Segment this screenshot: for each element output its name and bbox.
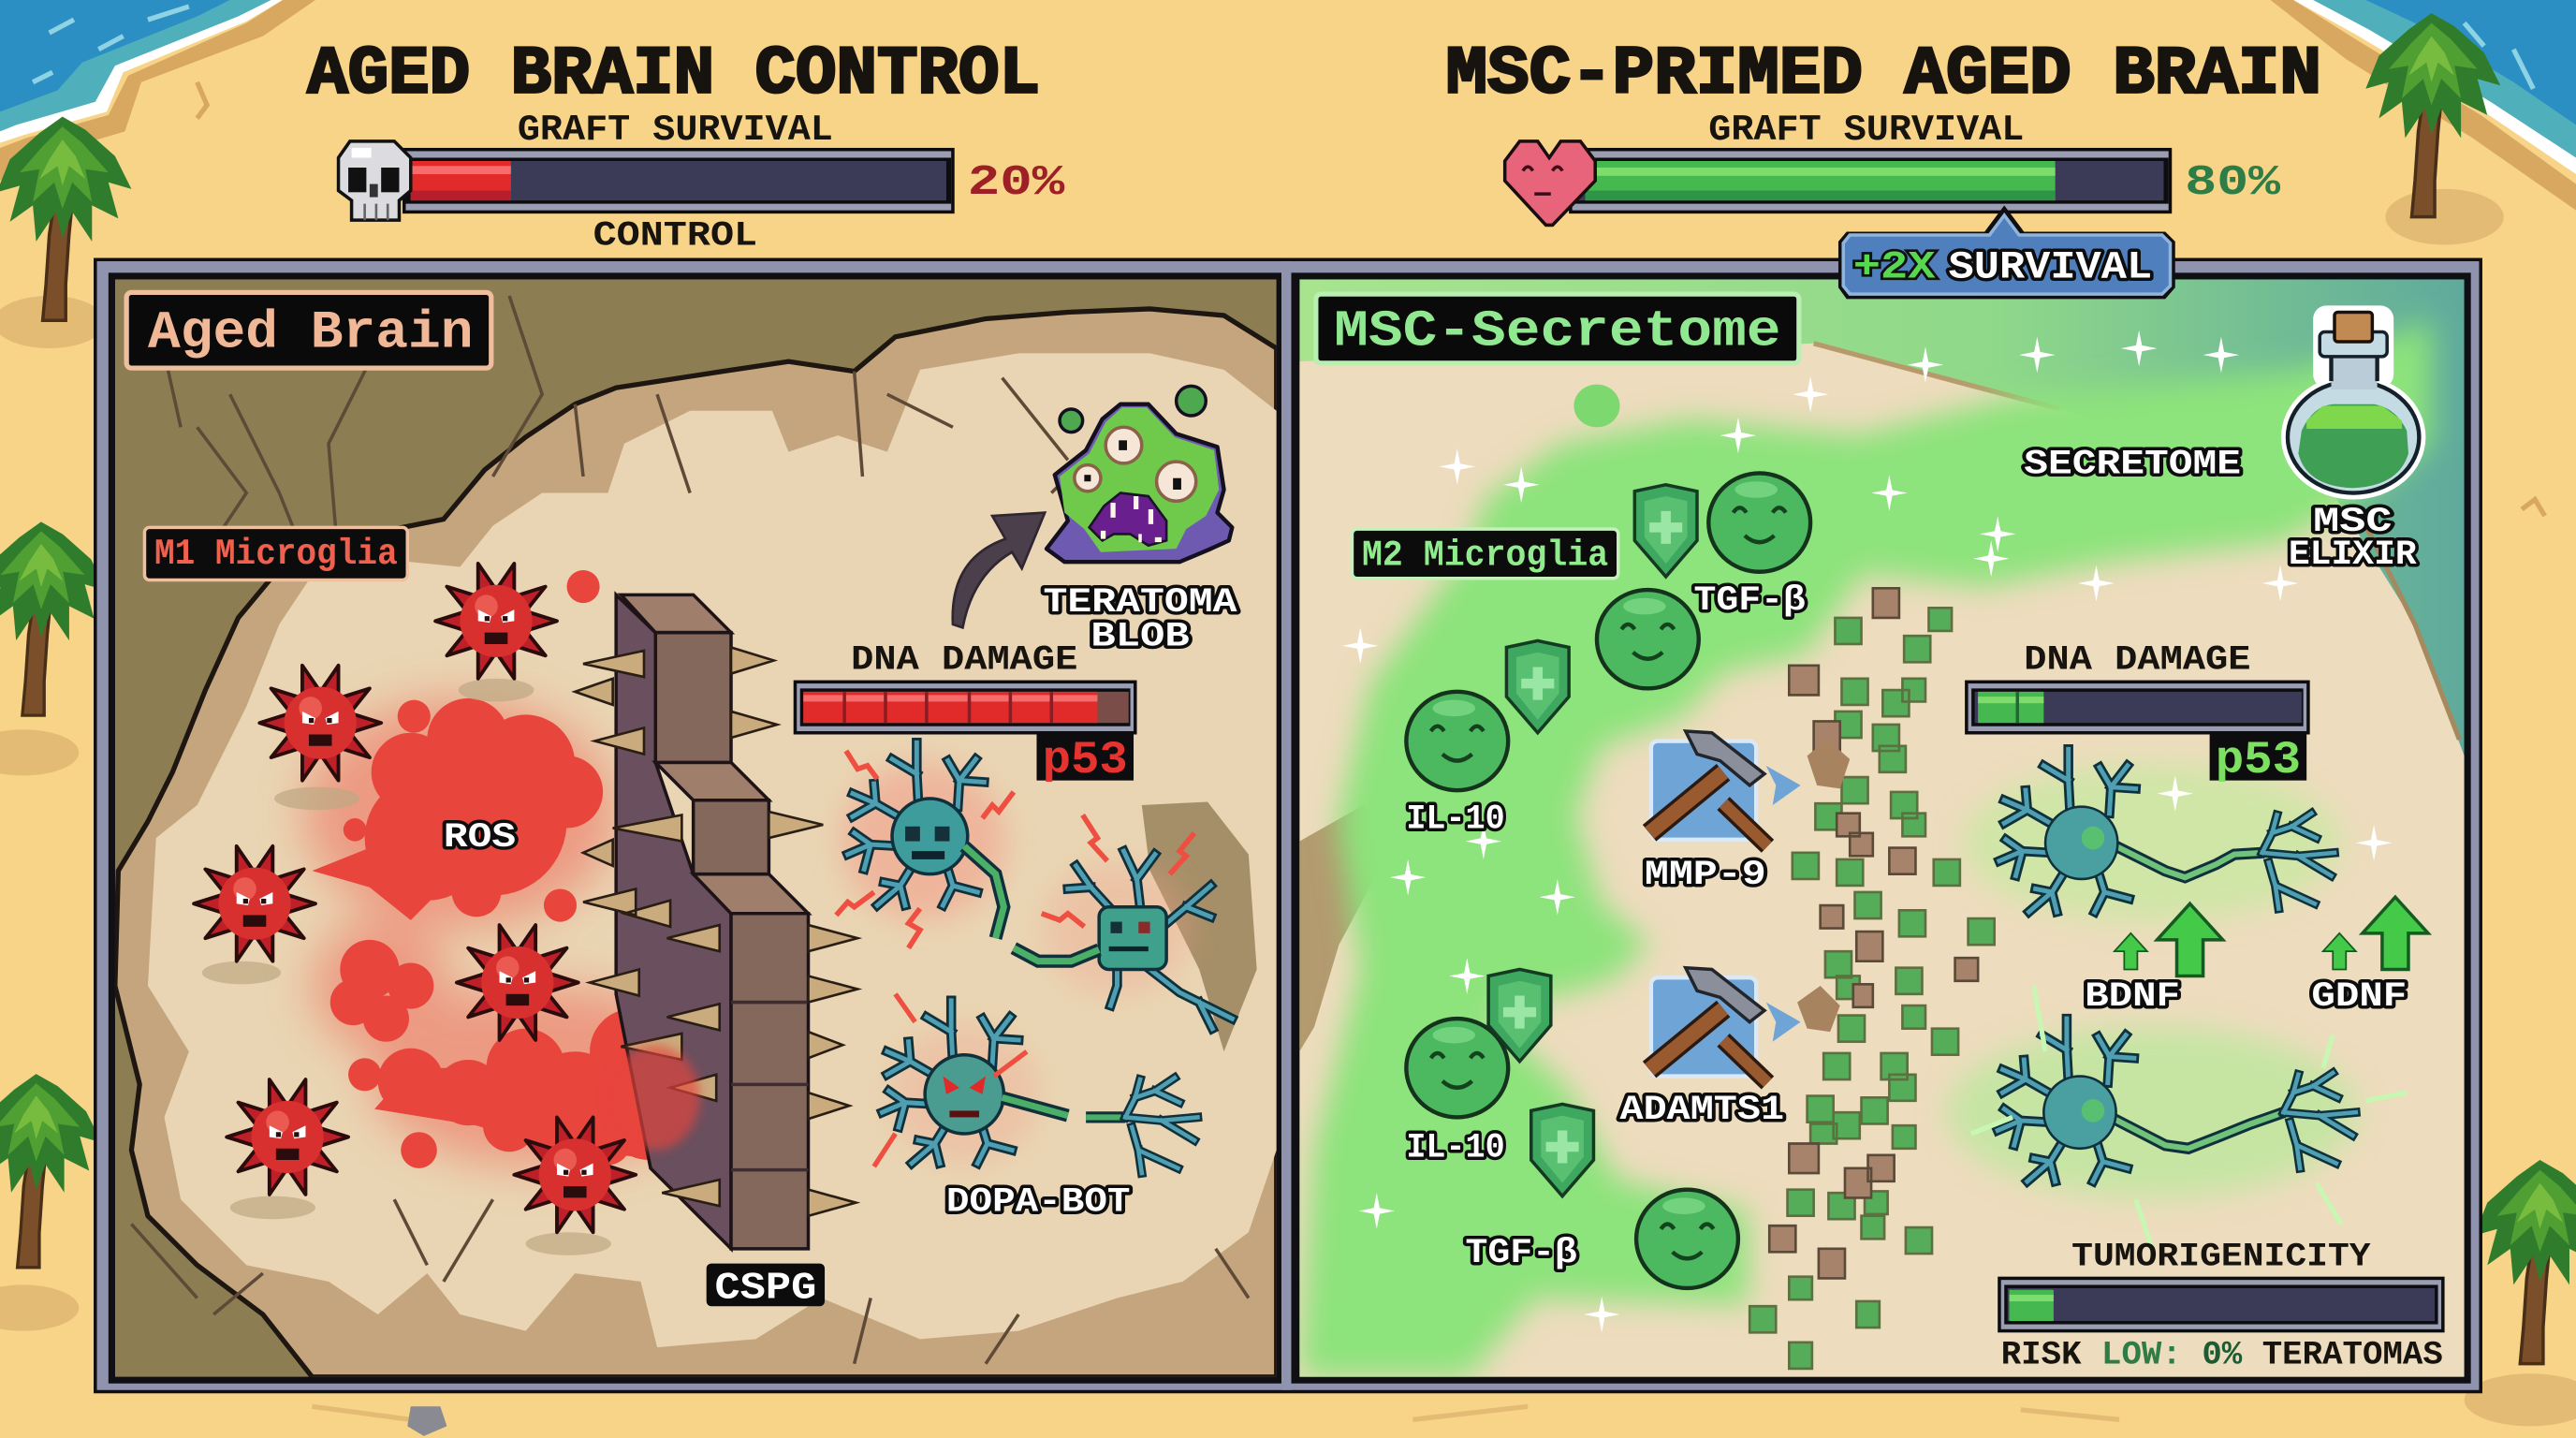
label: teratoma blob: TERATOMA: [1043, 583, 1238, 623]
label: msc elixir: ELIXIR: [2289, 536, 2418, 575]
ros cloud: lower: [374, 1011, 648, 1165]
dark lesion patch: [1142, 801, 1257, 1051]
label: msc secretome: [1316, 294, 1799, 363]
ros overlap on wall: [607, 1045, 700, 1151]
msc survival gauge: GRAFT SURVIVAL: [1708, 110, 2024, 151]
title: aged brain control: AGED BRAIN CONTROL: [307, 36, 1040, 112]
fill: 20 percent: [411, 161, 511, 200]
brain outline: [115, 309, 1277, 1377]
label: m2 microglia: M2 Microglia: [1362, 536, 1608, 577]
rubble near enzymes: [1797, 740, 1850, 1032]
label: secretome: SECRETOME: [2024, 445, 2241, 484]
label: teratoma blob: [1043, 583, 1238, 657]
m2 microglia smiling group: [1406, 473, 1810, 1288]
fill: 80 percent: [1586, 161, 2056, 200]
icon: msc elixir bottle: [2281, 305, 2425, 500]
panel background: atrophied tissue: [115, 279, 1277, 1377]
label: aged brain: Aged Brain: [148, 302, 473, 362]
healed neuron: lower: [1971, 986, 2407, 1249]
neurotrophic arrows: bdnf: [2115, 903, 2223, 976]
dna damage gauge: high: [794, 640, 1137, 786]
csps debris squares: green: [1749, 608, 1995, 1369]
icon: heart: [1505, 141, 1595, 225]
label: bdnf: BDNF: [2085, 977, 2180, 1017]
spiked cspg wall: [575, 594, 857, 1249]
label: teratoma blob: BLOB: [1090, 618, 1190, 657]
m1 microglia: group of six: [194, 564, 636, 1232]
brown scar on left edge: [1299, 805, 1397, 1051]
ros cloud: upper: [312, 698, 603, 920]
label: aged brain: [126, 292, 491, 368]
label: gdnf: GDNF: [2311, 977, 2407, 1017]
label: adamts1: ADAMTS1: [1620, 1091, 1784, 1130]
tag: p53: p53: [1043, 734, 1128, 786]
label: dopa-bot: DOPA-BOT: [946, 1182, 1131, 1222]
sparkles: [1342, 330, 2392, 1332]
tag: p53 green: p53: [2216, 734, 2301, 786]
icon: skull: [339, 141, 411, 220]
palm tree: low left: [0, 1074, 102, 1268]
lightning sparks: [836, 751, 1014, 948]
water: top-right sea: [2293, 0, 2576, 174]
dna damage gauge: low: [1965, 640, 2310, 786]
brain inner tissue: [148, 353, 1277, 1347]
dopa-bot neuron: upper left: [836, 742, 1014, 948]
value: 20 percent: 20%: [968, 158, 1065, 207]
palm tree: top left: [0, 117, 131, 320]
icon: teratoma blob: [1046, 386, 1232, 562]
palm tree: mid left: [0, 521, 107, 715]
brain tissue: healthy: [1299, 344, 2465, 1377]
healed neuron: upper: [1999, 749, 2334, 912]
callout: plus 2x survival: [1838, 205, 2175, 299]
ros droplets: [344, 570, 600, 1168]
icon: adamts1 hammer: [1649, 968, 1801, 1083]
wall spikes: [575, 647, 857, 1216]
dna damage gauge: high: DNA DAMAGE: [851, 640, 1077, 680]
palm tree: top right: [2365, 13, 2500, 217]
control survival gauge: CONTROL: [593, 216, 757, 256]
frame: outer console border: [94, 258, 2482, 1393]
microglia shadows: [202, 679, 611, 1255]
dna damage gauge: low: DNA DAMAGE: [2024, 640, 2250, 680]
msc survival gauge: [1505, 110, 2281, 225]
ros cloud: middle: [330, 940, 433, 1042]
label: msc secretome: MSC-Secretome: [1334, 304, 1781, 361]
protective shields: [1488, 485, 1697, 1196]
neurotrophic arrows: gdnf: [2323, 897, 2428, 969]
panel: msc secretome: [1299, 279, 2465, 1377]
ros halo: [304, 698, 714, 1167]
water: top-left sea: [0, 0, 283, 143]
icon: mmp-9 hammer: [1649, 731, 1801, 846]
tumorigenicity gauge: TUMORIGENICITY: [2071, 1238, 2371, 1275]
label: m1 microglia: M1 Microglia: [154, 534, 398, 575]
label: cspg: CSPG: [714, 1267, 816, 1310]
dopa-bot neuron: lower: [874, 994, 1197, 1173]
secretome green cloud: [1299, 320, 2432, 1377]
cracks: [131, 296, 1249, 1364]
label: mmp-9: MMP-9: [1645, 856, 1766, 895]
title: msc-primed aged brain: MSC-PRIMED AGED BRAIN: [1445, 36, 2321, 112]
label: il-10 lower: IL-10: [1406, 1129, 1505, 1168]
label: msc elixir: [2289, 503, 2418, 575]
label: tgf-beta upper: TGF-β: [1694, 581, 1806, 621]
callout: plus 2x survival: +2X: [1853, 245, 1936, 290]
value: 80 percent: 80%: [2185, 158, 2281, 207]
label: msc elixir: MSC: [2313, 503, 2392, 542]
callout: plus 2x survival: SURVIVAL: [1949, 245, 2152, 290]
label: tgf-beta lower: TGF-β: [1466, 1234, 1577, 1273]
control survival gauge: GRAFT SURVIVAL: [518, 110, 833, 151]
tumorigenicity gauge: [1998, 1238, 2445, 1374]
label: ros: ROS: [444, 818, 516, 858]
dopa-bot neuron: upper right: [1014, 814, 1232, 1029]
floating secretome droplet: [1573, 385, 1620, 427]
label: il-10 upper: IL-10: [1406, 800, 1505, 840]
neuron glow: upper and lower: [1947, 764, 2358, 1197]
panel background: sky gradient: [1299, 279, 2465, 1377]
risk caption: RISK LOW: 0% TERATOMAS: [2001, 1337, 2443, 1374]
lightning sparks: [1042, 814, 1194, 927]
pebble: [407, 1406, 446, 1436]
panel: aged brain: [115, 279, 1277, 1377]
palm tree: low right: [2474, 1160, 2576, 1364]
arrow: toward teratoma: [953, 513, 1045, 627]
control survival gauge: [339, 110, 1065, 256]
csps debris squares: brown: [1769, 588, 1978, 1278]
